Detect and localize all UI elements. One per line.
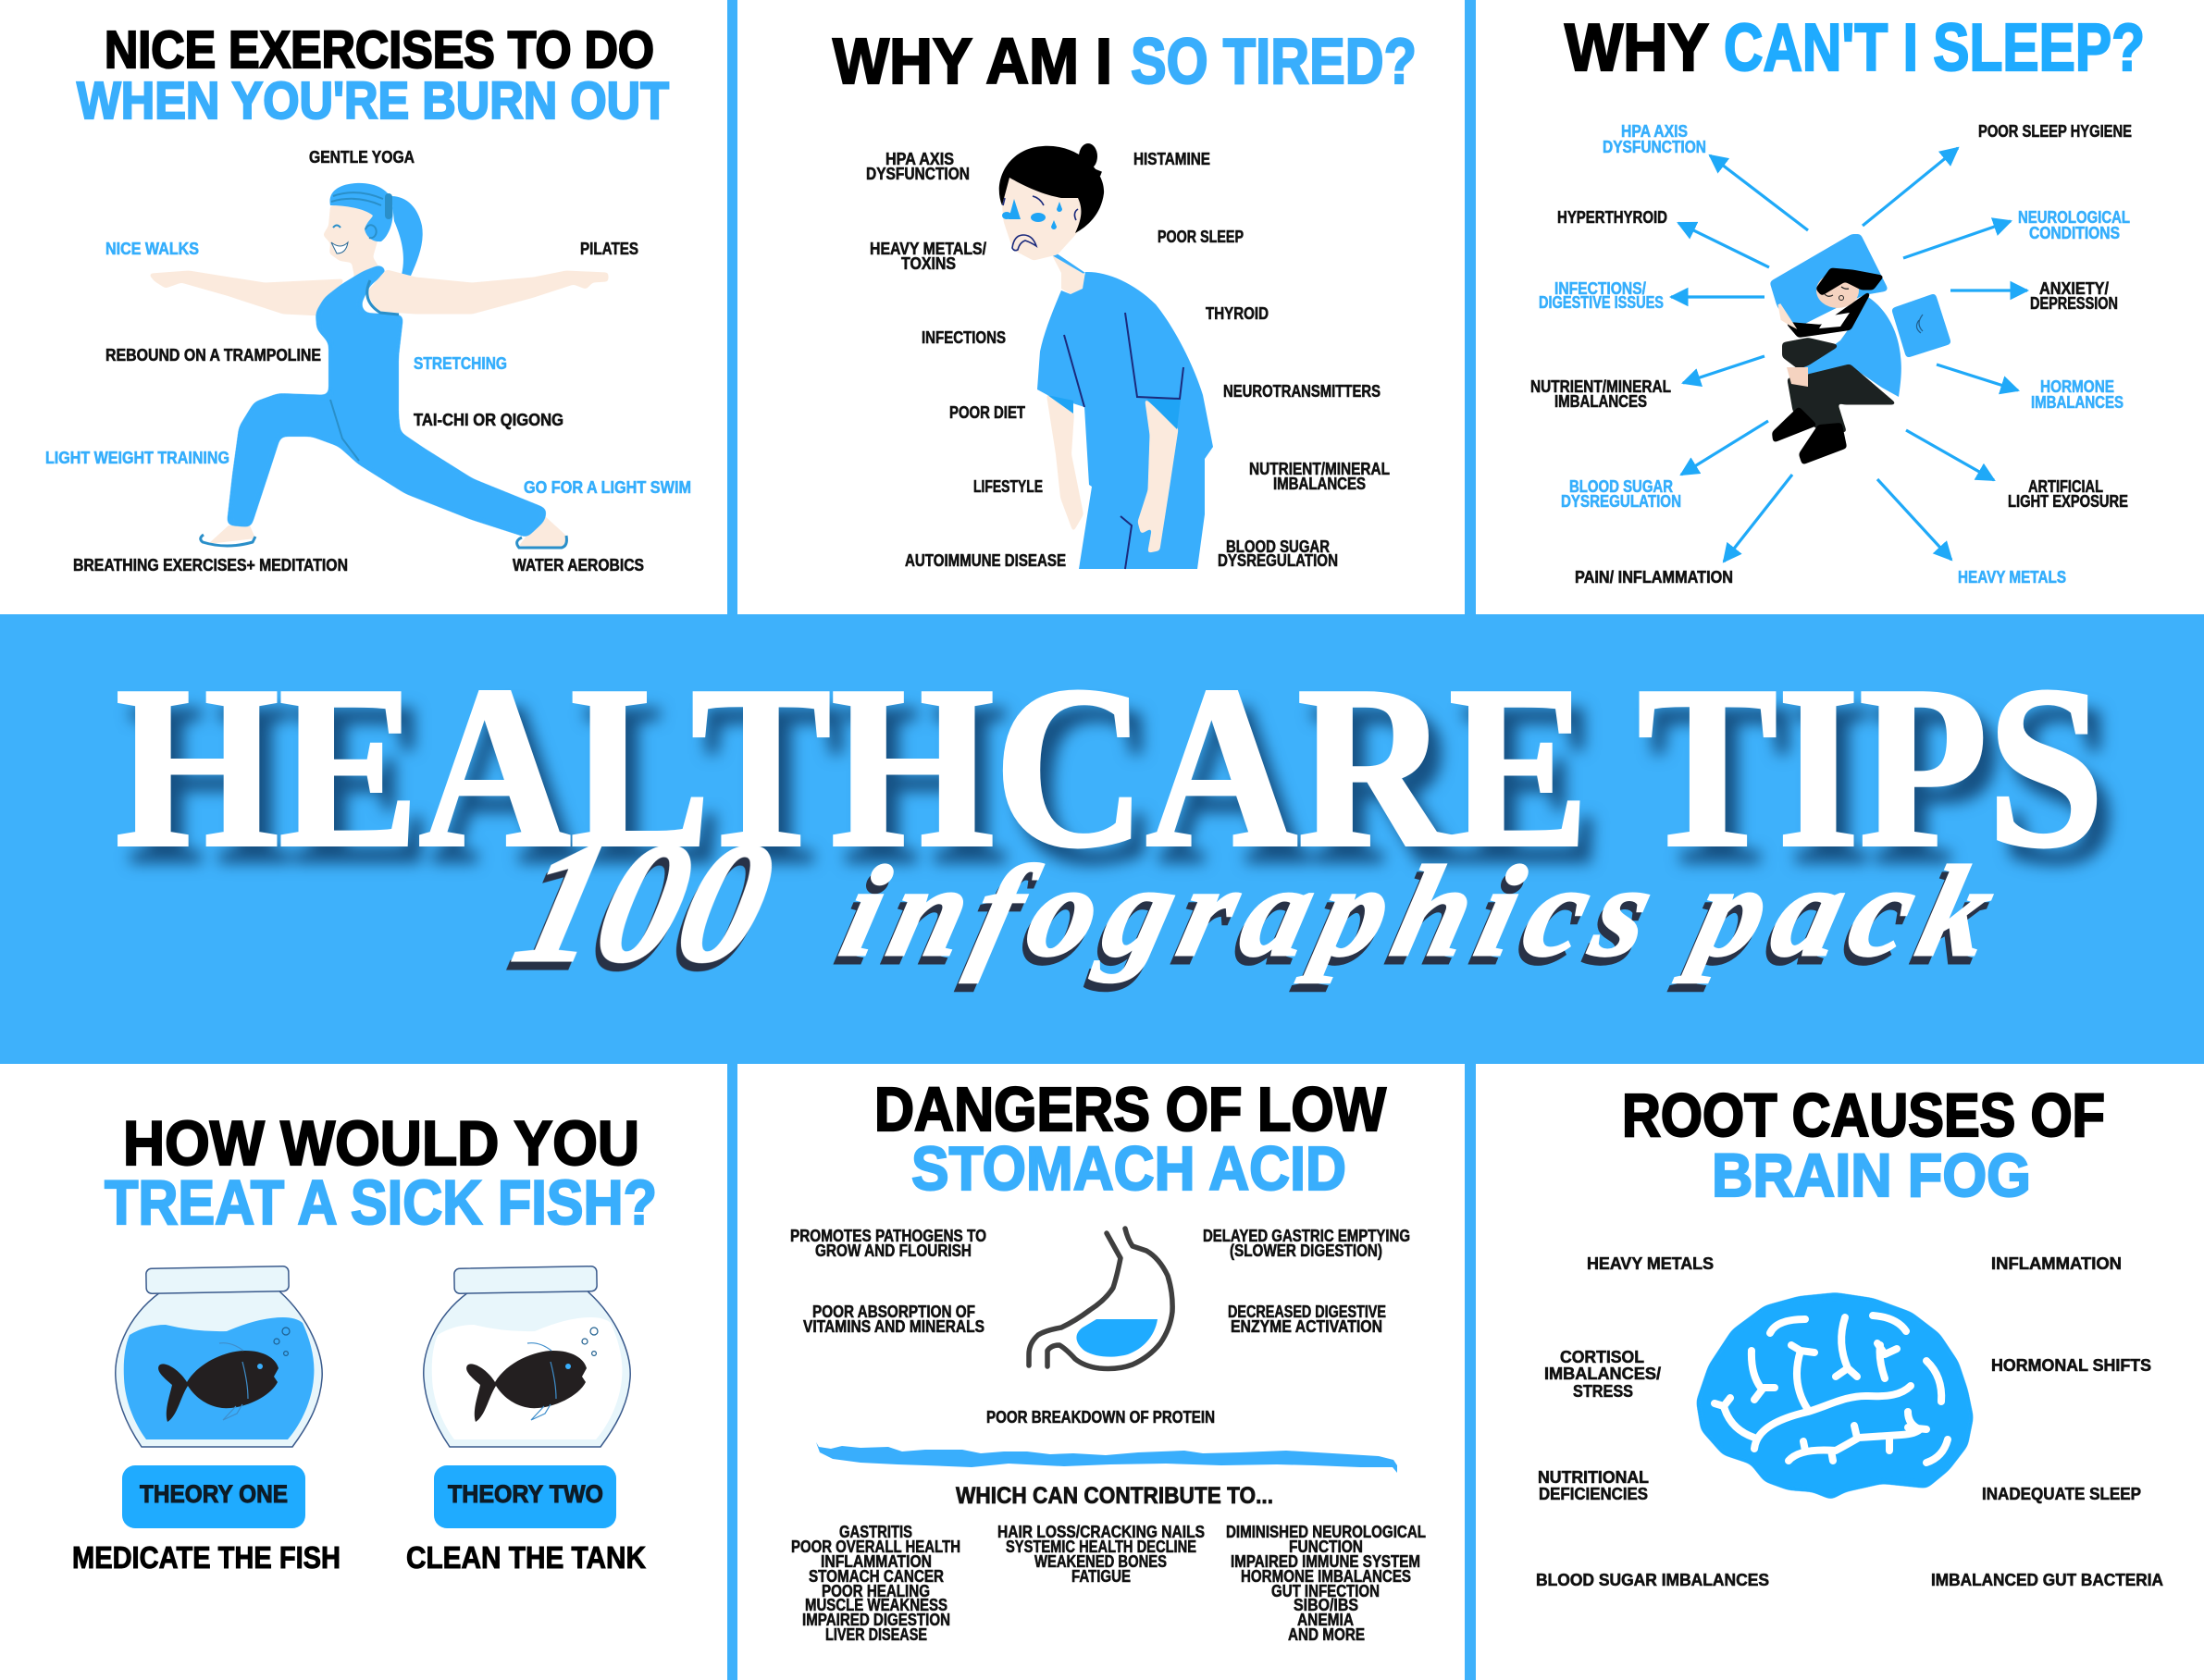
button: theory one: THEORY ONE (140, 1480, 288, 1508)
labels: exercises list: WATER AEROBICS (513, 556, 644, 574)
labels: exercises list: STRETCHING (414, 354, 507, 373)
panel: why am I so tired (833, 25, 1417, 570)
labels: causes of tiredness: HEAVY METALS/ (870, 240, 986, 258)
title: nice exercises (77, 20, 669, 130)
list: first column: IMPAIRED DIGESTION (802, 1611, 950, 1629)
title: can't sleep: WHY (1565, 11, 1709, 85)
title: so tired (833, 25, 1417, 97)
list: third column (1226, 1523, 1426, 1644)
labels: causes of tiredness: INFECTIONS (922, 328, 1006, 347)
labels: exercises list: REBOUND ON A TRAMPOLINE (105, 346, 321, 364)
list: first column: GASTRITIS (839, 1523, 912, 1541)
labels: effects around stomach: POOR ABSORPTION OF (812, 1303, 975, 1321)
labels: causes of tiredness: POOR SLEEP (1158, 228, 1244, 246)
labels: causes of brain fog: DEFICIENCIES (1539, 1485, 1648, 1503)
title: stomach acid: STOMACH ACID (911, 1134, 1346, 1204)
labels: causes of sleeplessness: HPA AXIS (1621, 122, 1688, 141)
labels: effects around stomach (790, 1227, 1410, 1427)
list: third column: ANEMIA (1297, 1611, 1354, 1629)
labels: causes of tiredness: TOXINS (901, 254, 956, 273)
labels: causes of brain fog: IMBALANCES/ (1544, 1365, 1661, 1383)
title: treat a sick fish: HOW WOULD YOU (123, 1108, 639, 1179)
labels: causes of tiredness: NEUROTRANSMITTERS (1223, 382, 1381, 401)
list: third column: FUNCTION (1289, 1538, 1363, 1556)
labels: effects around stomach: DELAYED GASTRIC EMPTYING (1203, 1227, 1410, 1245)
labels: causes of tiredness: HISTAMINE (1133, 150, 1210, 168)
subheading: 100 infographics pack (500, 809, 2007, 997)
list: first column: INFLAMMATION (821, 1552, 932, 1571)
labels: causes of tiredness: DYSFUNCTION (866, 165, 970, 183)
list: third column: IMPAIRED IMMUNE SYSTEM (1231, 1552, 1420, 1571)
list: first column: POOR HEALING (822, 1582, 930, 1600)
labels: causes of tiredness: BLOOD SUGAR (1226, 537, 1330, 556)
illustration: tired person slouching (999, 143, 1213, 569)
labels: causes of brain fog: STRESS (1573, 1382, 1633, 1401)
labels: causes of tiredness: IMBALANCES (1273, 475, 1366, 493)
labels: causes of sleeplessness: CONDITIONS (2029, 224, 2120, 242)
title: nice exercises: NICE EXERCISES TO DO (105, 20, 654, 80)
subheading: which can contribute to: WHICH CAN CONTRIBUTE TO... (956, 1483, 1273, 1509)
labels: causes of tiredness: DYSREGULATION (1218, 551, 1338, 570)
labels: causes of sleeplessness: NEUROLOGICAL (2018, 208, 2130, 227)
labels: causes of brain fog: NUTRITIONAL (1538, 1468, 1649, 1487)
list: first column (791, 1523, 960, 1644)
labels: causes of sleeplessness: LIGHT EXPOSURE (2008, 492, 2128, 511)
labels: causes of brain fog: BLOOD SUGAR IMBALANCES (1536, 1571, 1769, 1589)
list: third column: AND MORE (1288, 1625, 1365, 1644)
list: first column: MUSCLE WEAKNESS (805, 1596, 947, 1614)
labels: causes of brain fog: HEAVY METALS (1587, 1254, 1714, 1273)
labels: causes of sleeplessness: NUTRIENT/MINERAL (1530, 377, 1671, 396)
panel: dangers of low stomach acid (790, 1075, 1426, 1644)
title: treat a sick fish: TREAT A SICK FISH? (105, 1167, 657, 1238)
list: second column: WEAKENED BONES (1034, 1552, 1167, 1571)
panel: why can't I sleep (1530, 11, 2145, 587)
icon: stomach with low acid (1029, 1229, 1172, 1369)
labels: effects around stomach: GROW AND FLOURISH (815, 1241, 972, 1260)
labels: causes of tiredness (866, 150, 1390, 570)
labels: exercises list: PILATES (580, 240, 638, 258)
labels: causes of sleeplessness: DYSFUNCTION (1603, 138, 1706, 156)
title: stomach acid: DANGERS OF LOW (874, 1075, 1387, 1144)
list: second column: FATIGUE (1071, 1567, 1131, 1586)
labels: effects around stomach: POOR BREAKDOWN OF PROTEIN (986, 1408, 1215, 1427)
list: third column: SIBO/IBS (1294, 1596, 1358, 1614)
labels: causes of sleeplessness: IMBALANCES (1554, 392, 1647, 411)
labels: causes of sleeplessness (1530, 122, 2132, 587)
title: can't sleep (1565, 11, 2145, 85)
list: second column: HAIR LOSS/CRACKING NAILS (997, 1523, 1205, 1541)
labels: effects around stomach: ENZYME ACTIVATION (1231, 1317, 1382, 1336)
labels: causes of sleeplessness: PAIN/ INFLAMMATION (1575, 568, 1733, 587)
illustration: woman in yoga lunge (151, 183, 607, 548)
labels: causes of sleeplessness: POOR SLEEP HYGIENE (1978, 122, 2132, 141)
labels: effects around stomach: PROMOTES PATHOGENS TO (790, 1227, 986, 1245)
labels: exercises list: NICE WALKS (105, 240, 199, 258)
labels: causes of sleeplessness: HEAVY METALS (1958, 568, 2066, 587)
labels: effects around stomach: (SLOWER DIGESTION) (1230, 1241, 1382, 1260)
divider: brush stroke (816, 1442, 1397, 1473)
labels: exercises list (45, 148, 691, 574)
list: third column: GUT INFECTION (1271, 1582, 1380, 1600)
panel: sick fish (72, 1108, 657, 1575)
labels: causes of brain fog: IMBALANCED GUT BACTERIA (1931, 1571, 2163, 1589)
labels: causes of sleeplessness: BLOOD SUGAR (1569, 477, 1673, 496)
panel: root causes of brain fog (1536, 1081, 2163, 1589)
labels: causes of sleeplessness: INFECTIONS/ (1554, 279, 1646, 298)
button: theory one (122, 1465, 305, 1528)
list: second column (997, 1523, 1205, 1586)
illustration: person curled up hugging pillow (1773, 237, 1949, 463)
panel: exercises for burn out (45, 20, 691, 574)
icon: brain (1698, 1294, 1972, 1498)
labels: causes of brain fog: HORMONAL SHIFTS (1991, 1356, 2151, 1375)
button: theory two (434, 1465, 616, 1528)
labels: causes of tiredness: THYROID (1206, 304, 1269, 323)
labels: causes of tiredness: NUTRIENT/MINERAL (1249, 460, 1390, 478)
labels: exercises list: BREATHING EXERCISES+ MEDITATION (73, 556, 348, 574)
title: nice exercises: WHEN YOU'RE BURN OUT (77, 71, 669, 130)
labels: effects around stomach: VITAMINS AND MINERALS (803, 1317, 984, 1336)
arrows: radiating causes (1671, 148, 2027, 562)
illustration: fishbowl with clean water (424, 1266, 630, 1447)
button: theory two: THEORY TWO (448, 1480, 603, 1508)
labels: causes of tiredness: LIFESTYLE (973, 477, 1043, 496)
labels: causes of sleeplessness: HYPERTHYROID (1557, 208, 1667, 227)
labels: causes of brain fog: CORTISOL (1560, 1348, 1644, 1366)
labels: causes of brain fog: INADEQUATE SLEEP (1982, 1485, 2141, 1503)
labels: exercises list: GENTLE YOGA (309, 148, 415, 167)
labels: effects around stomach: DECREASED DIGESTIVE (1228, 1303, 1386, 1321)
list: second column: SYSTEMIC HEALTH DECLINE (1006, 1538, 1196, 1556)
title: brain fog: ROOT CAUSES OF (1622, 1081, 2105, 1149)
labels: causes of tiredness: HPA AXIS (885, 150, 954, 168)
list: first column: LIVER DISEASE (825, 1625, 927, 1644)
caption: clean the tank: CLEAN THE TANK (406, 1540, 646, 1575)
subheading: 100 infographics pack: 100 (500, 809, 789, 997)
labels: exercises list: GO FOR A LIGHT SWIM (524, 478, 691, 497)
title: so tired: WHY AM I (833, 25, 1112, 97)
title: stomach acid (874, 1075, 1387, 1204)
list: first column: STOMACH CANCER (809, 1567, 944, 1586)
labels: causes of sleeplessness: IMBALANCES (2031, 393, 2124, 412)
list: third column: DIMINISHED NEUROLOGICAL (1226, 1523, 1426, 1541)
labels: causes of brain fog (1536, 1254, 2163, 1589)
subheading: 100 infographics pack: infographics (829, 839, 1666, 983)
list: third column: HORMONE IMBALANCES (1241, 1567, 1411, 1586)
title: brain fog: BRAIN FOG (1712, 1141, 2031, 1209)
labels: causes of sleeplessness: DEPRESSION (2030, 294, 2118, 313)
title: brain fog (1622, 1081, 2105, 1209)
labels: causes of tiredness: AUTOIMMUNE DISEASE (905, 551, 1066, 570)
subheading: 100 infographics pack: pack (1673, 839, 2007, 983)
labels: exercises list: TAI-CHI OR QIGONG (414, 411, 563, 429)
labels: exercises list: LIGHT WEIGHT TRAINING (45, 449, 229, 467)
labels: causes of sleeplessness: ARTIFICIAL (2028, 477, 2103, 496)
labels: causes of brain fog: INFLAMMATION (1991, 1254, 2122, 1273)
labels: causes of sleeplessness: DYSREGULATION (1561, 492, 1681, 511)
caption: medicate the fish: MEDICATE THE FISH (72, 1540, 341, 1575)
title: treat a sick fish (105, 1108, 657, 1238)
labels: causes of sleeplessness: HORMONE (2040, 377, 2114, 396)
list: first column: POOR OVERALL HEALTH (791, 1538, 960, 1556)
labels: causes of sleeplessness: ANXIETY/ (2039, 279, 2109, 298)
banner: healthcare tips (0, 614, 2204, 1064)
title: so tired: SO TIRED? (1131, 25, 1417, 97)
labels: causes of tiredness: POOR DIET (949, 403, 1025, 422)
illustration: fishbowl with dirty water (116, 1266, 322, 1447)
labels: causes of sleeplessness: DIGESTIVE ISSUES (1539, 293, 1664, 312)
